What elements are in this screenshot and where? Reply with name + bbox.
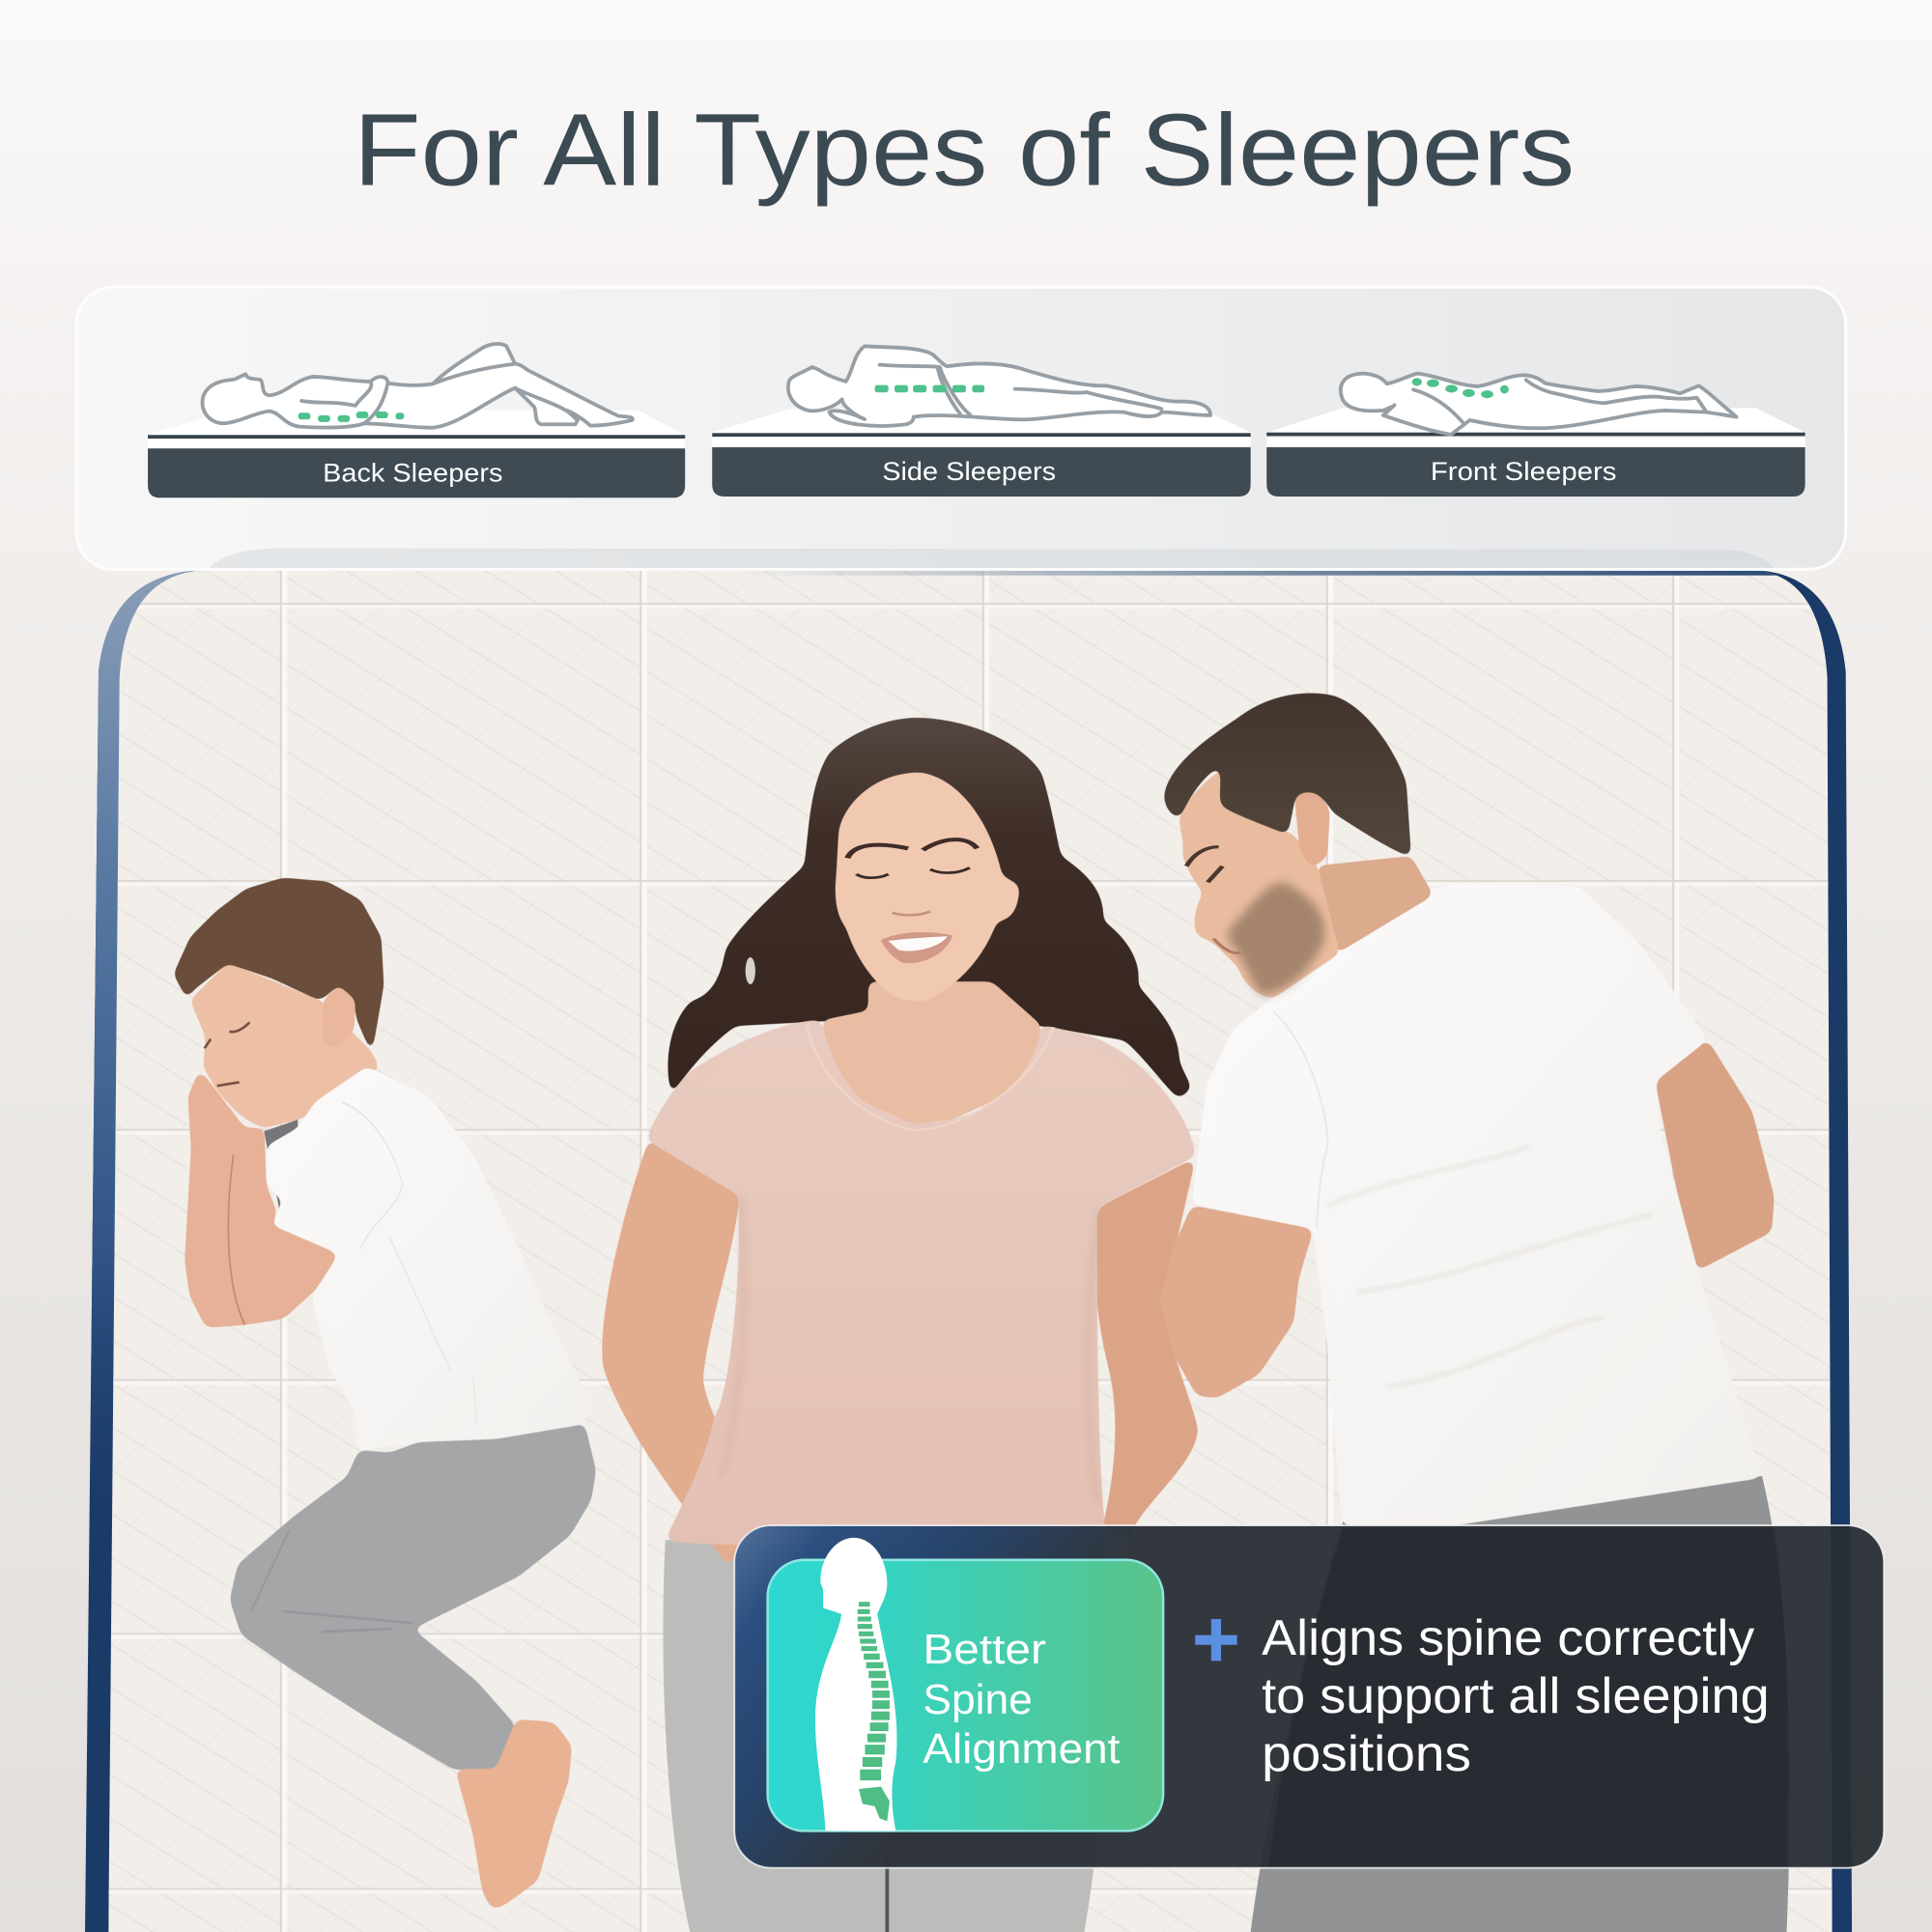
badge text [923,1627,1120,1773]
man far arm [1656,1039,1774,1270]
mother pants seam [886,1861,889,1932]
mother teeth [889,936,948,951]
spine vertebrae [858,1602,890,1821]
boy arm and hand [185,1070,338,1327]
boy arm crease [228,1154,244,1324]
boy shirt seams [341,1102,476,1424]
label: Front Sleepers [1431,457,1616,486]
sleeper card: front sleepers [1266,374,1805,497]
mother closed eyes [856,867,970,878]
mother shirt [647,1020,1195,1545]
sleeper card: back sleepers [148,344,685,497]
man pants [1251,1476,1790,1932]
mother hair [668,718,1191,1098]
mother face [836,773,1019,1002]
man hair [1164,694,1410,857]
boy hair [174,878,384,1054]
benefit text: positions [1262,1726,1471,1782]
label: Back Sleepers [323,459,502,488]
person: mother [603,718,1198,1932]
man shirt [1192,885,1761,1525]
panel background [734,1525,1884,1868]
boy pants [230,1424,596,1770]
spine dashes [875,385,984,392]
man sleeve seam [1273,1011,1327,1228]
boy shirt [268,1067,592,1450]
person: man [1160,694,1790,1932]
body silhouette [815,1538,896,1831]
spine dashes [1412,378,1509,398]
sleeper card: side sleepers [712,346,1251,497]
man face [1179,763,1339,998]
figure outline [203,344,633,428]
plus icon [1195,1619,1237,1661]
mother shirt shading [721,1195,1099,1503]
mother collar [807,1024,1054,1130]
man body [1160,885,1774,1525]
mattress top [712,409,1251,433]
mattress layers [1266,433,1805,437]
mother nose [893,911,930,915]
benefit text: Aligns spine correctly [1262,1610,1755,1666]
benefit text: to support all sleeping [1262,1668,1770,1724]
blurred frame glimpse [210,548,1775,568]
mattress layers [712,433,1251,437]
mother brows [847,839,977,858]
man ear [1295,792,1329,867]
man neck [1318,857,1433,953]
mother hair and head [668,718,1191,1098]
boy closed eyes and mouth [205,1022,249,1086]
mother head [807,773,1054,1130]
mattress top [1266,408,1805,433]
man head [1164,694,1433,998]
title: For All Types of Sleepers [354,93,1575,207]
benefit text [1262,1610,1770,1782]
badge text: Spine [923,1677,1033,1723]
callout panel: spine alignment [734,1525,1884,1868]
man near arm [1160,1206,1313,1398]
mother arm left [603,1140,770,1565]
badge text: Alignment [923,1726,1120,1773]
boy pants fold [251,1529,412,1632]
man shirt folds [1327,1146,1653,1387]
badge background [768,1560,1163,1831]
figure outline [788,346,1210,426]
mother lips [881,932,952,963]
spine dashes [298,412,404,422]
mattress layers [148,435,685,439]
mattress [74,567,1861,1932]
person: boy [174,878,596,1910]
green badge [768,1538,1163,1831]
man beard [1229,882,1324,995]
boy ear [324,985,355,1048]
boy head [174,878,384,1127]
boy face [190,963,379,1127]
boy body [185,1067,596,1910]
pants seen through panel [1269,1528,1788,1866]
boy inner sleeve shadow [264,1120,299,1213]
hair gap [746,957,755,984]
glass panel: sleeper types [76,287,1846,569]
label: Side Sleepers [882,457,1056,486]
badge text: Better [923,1627,1046,1673]
boy foot [456,1719,572,1910]
figure outline [1341,374,1737,435]
mattress quilted surface [74,569,1861,1932]
mother arm right [1095,1158,1198,1540]
man brow and closed eye [1186,847,1223,882]
mattress blue frame [74,567,1861,1932]
mattress top [148,411,685,435]
mother neck and chest [822,982,1041,1123]
mother pants [663,1528,1106,1932]
panel backdrop [76,287,1846,569]
man mouth [1213,939,1240,953]
